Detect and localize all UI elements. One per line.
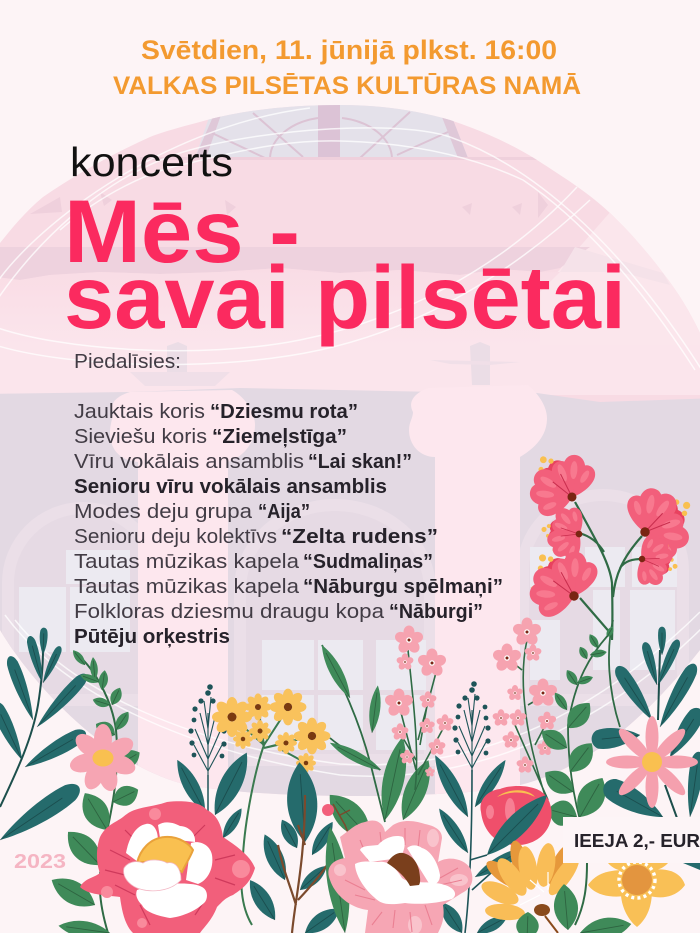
entry price label (563, 817, 700, 863)
red tulip (480, 786, 555, 862)
participants list: “Nāburgi” (389, 601, 483, 623)
title line 2: savai pilsētai (64, 247, 626, 347)
right green vine (537, 620, 620, 829)
participants list: Senioru deju kolektīvs (74, 526, 277, 548)
participants list: “Lai skan!” (308, 451, 412, 473)
venue line: VALKAS PILSĒTAS KULTŪRAS NAMĀ (113, 72, 581, 100)
date line: Svētdien, 11. jūnijā plkst. 16:00 (141, 35, 557, 65)
red flower group, top right (509, 434, 700, 640)
arched windows (8, 495, 683, 760)
big light pink peony (328, 820, 472, 933)
participants list: Jauktais koris (74, 401, 205, 423)
wall below band (0, 268, 560, 345)
finials (167, 342, 490, 385)
lower wall (0, 388, 700, 810)
pink daisy, right (606, 716, 698, 808)
participants list: Vīru vokālais ansamblis (74, 451, 304, 473)
yellow flower, bottom right (588, 862, 685, 927)
left teal branch (0, 628, 91, 849)
participants list: “Nāburgu spēlmaņi” (303, 576, 503, 598)
white curves (0, 108, 700, 776)
green plant above pink flower (317, 642, 438, 933)
participants list: Modes deju grupa (74, 501, 253, 523)
participants list: “Dziesmu rota” (210, 401, 358, 423)
dark band (0, 247, 590, 280)
yellow gerbera (478, 839, 584, 933)
participants list (74, 351, 503, 648)
teal leaves with brown stem (243, 761, 344, 933)
participants list: “Zelta rudens” (281, 526, 438, 548)
left green vine with pink flower (46, 648, 144, 933)
participants list: Pūtēju orķestris (74, 626, 230, 648)
participants list: “Aija” (258, 501, 310, 523)
pale side of wall (540, 210, 700, 345)
participants list: Senioru vīru vokālais ansamblis (74, 476, 387, 498)
participants list: “Sudmaliņas” (303, 551, 433, 573)
participants list: Tautas mūzikas kapela (74, 551, 300, 573)
pink forget-me-nots, right (492, 618, 558, 810)
right teal plant (591, 627, 700, 827)
columns (110, 385, 547, 820)
building in dome (0, 100, 700, 820)
entry price label: IEEJA 2,- EUR (574, 831, 700, 851)
participants list: “Ziemeļstīga” (212, 426, 347, 448)
subtitle: koncerts: koncerts (70, 139, 233, 185)
title line 1: Mēs - (64, 181, 300, 281)
participants list: Sieviešu koris (74, 426, 207, 448)
big coral peony (80, 801, 255, 933)
participants list: Piedalīsies: (74, 351, 181, 373)
yellow flowers (212, 689, 330, 925)
small wall ornaments (30, 192, 548, 218)
teal sprig and leaves, centre right (429, 681, 530, 933)
participants list: Tautas mūzikas kapela (74, 576, 300, 598)
bottom green leaves (516, 863, 633, 933)
participants list: Folkloras dziesmu draugu kopa (74, 601, 385, 623)
gable with lattice window (140, 100, 540, 160)
teal sprig with dots, left (171, 684, 256, 841)
pink forget-me-nots, left (384, 626, 454, 790)
year: 2023 (14, 851, 66, 873)
